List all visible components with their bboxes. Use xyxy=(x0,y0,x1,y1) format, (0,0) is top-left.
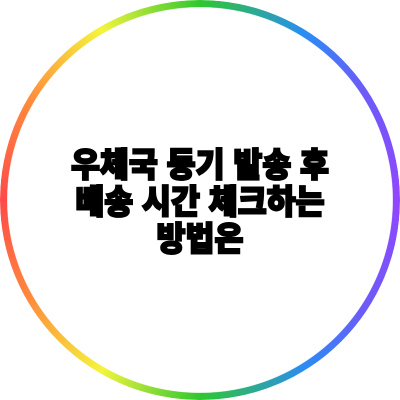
title: 배송 시간 체크하는 xyxy=(75,183,325,221)
title: 우체국 등기 발송 후 xyxy=(71,146,329,184)
title: 방법은 xyxy=(157,220,243,258)
title xyxy=(71,146,329,258)
